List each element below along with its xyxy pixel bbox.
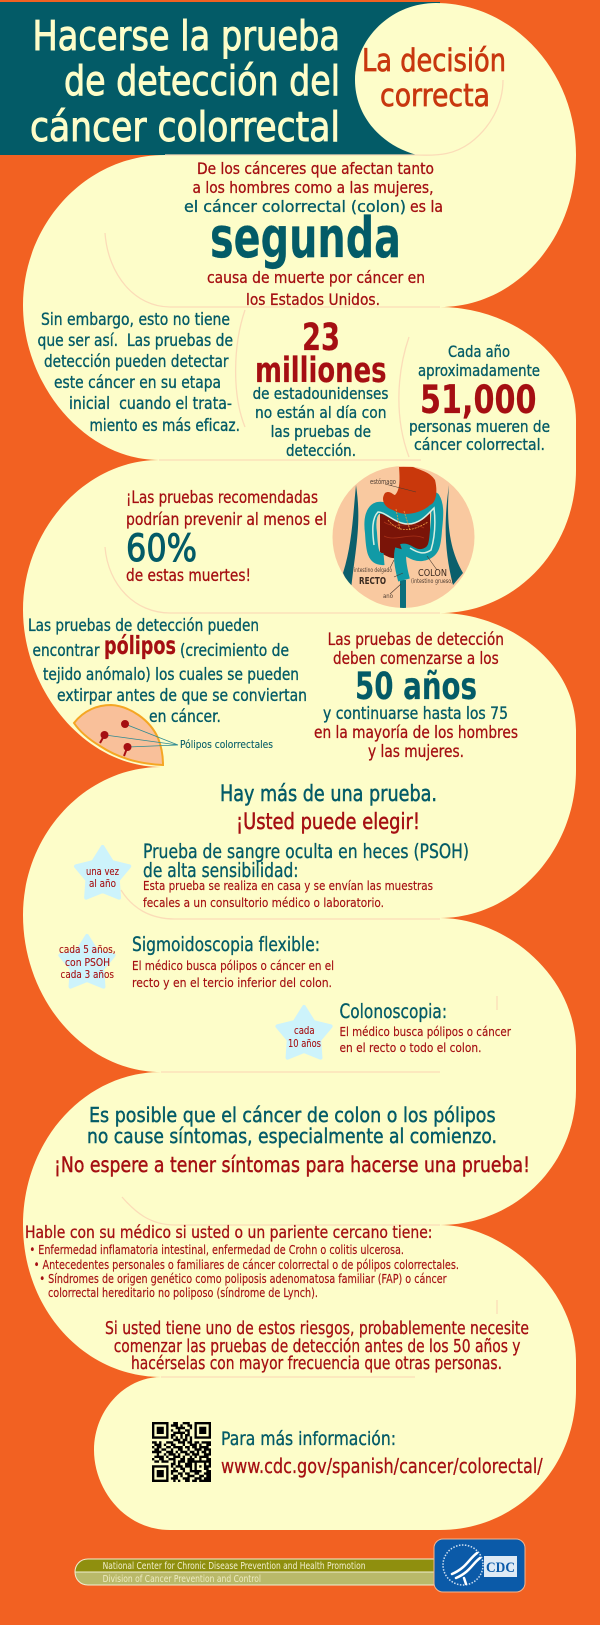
statistic: 60%: de estas muertes! — [126, 566, 251, 586]
logo: HHS and CDC: CDC — [486, 1560, 515, 1576]
text block: screening age: y continuarse hasta los 75 — [323, 704, 508, 723]
intro statement: De los cánceres que afectan tanto — [197, 159, 434, 178]
text block: risk factors: • Síndromes de origen genético como poliposis adenomatosa familiar (FAP) o cáncer — [39, 1271, 447, 1286]
intro statement: causa de muerte por cáncer en — [207, 268, 425, 287]
illustration: digestive system: RECTO — [359, 576, 386, 587]
title banner — [0, 2, 440, 155]
statistic: 51,000: aproximadamente — [418, 361, 540, 380]
text block: polyps: Las pruebas de detección pueden — [28, 616, 259, 636]
subtitle — [362, 43, 506, 114]
statistic: 23 milliones: 23 — [302, 316, 340, 359]
illustration: digestive system: (intestino grueso) — [411, 578, 453, 585]
text block: risk factors: • Antecedentes personales o familiares de cáncer colorrectal o de pólipos colorrectales. — [34, 1257, 459, 1272]
option: stool test — [76, 840, 469, 910]
statistic: 23 milliones: detección. — [286, 441, 356, 460]
statistic: 23 milliones: milliones — [255, 351, 386, 391]
statistic: 23 milliones — [253, 316, 388, 460]
statistic: 51,000 — [409, 342, 550, 454]
option: stool test: al año — [89, 877, 116, 890]
heading: test options: ¡Usted puede elegir! — [236, 810, 420, 835]
option: colonoscopy: en el recto o todo el colon. — [340, 1040, 482, 1055]
text block: symptoms — [54, 1103, 530, 1177]
intro statement — [184, 159, 443, 309]
footer bar: Division of Cancer Prevention and Control — [103, 1574, 261, 1585]
text block: polyps — [28, 616, 307, 727]
logo: HHS and CDC — [434, 1539, 525, 1592]
option: stool test: una vez — [86, 865, 119, 878]
intro statement: los Estados Unidos. — [246, 290, 380, 309]
footer bar — [75, 1559, 438, 1585]
statistic: 60%: ¡Las pruebas recomendadas — [126, 488, 318, 508]
illustration: polyps: Pólipos colorrectales — [180, 739, 273, 751]
option: stool test: Esta prueba se realiza en casa y se envían las muestras — [143, 878, 433, 893]
intro statement: segunda — [210, 206, 401, 271]
text block: early detection: inicial cuando el trata- — [69, 394, 232, 414]
option: colonoscopy — [277, 1000, 512, 1058]
statistic: 51,000: personas mueren de — [409, 417, 550, 436]
statistic: 60%: podrían prevenir al menos el — [126, 510, 327, 530]
text block: early detection: detección pueden detectar — [44, 352, 229, 372]
text block: symptoms: Es posible que el cáncer de colon o los pólipos — [89, 1103, 496, 1127]
text block: screening age — [314, 630, 518, 761]
text block: polyps: tejido anómalo) los cuales se pueden — [43, 665, 299, 685]
more information: Para más información: — [221, 1428, 396, 1450]
option: flexible sigmoidoscopy: cada 5 años, — [59, 943, 116, 956]
text block: higher risk advice: hacérselas con mayor frecuencia que otras personas. — [131, 1354, 502, 1374]
text block: higher risk advice — [105, 1319, 529, 1374]
option: colonoscopy: cada — [294, 1024, 315, 1037]
illustration: digestive system: ano — [383, 592, 393, 600]
heading: test options — [220, 782, 437, 835]
option: stool test: de alta sensibilidad: — [143, 859, 298, 882]
option: flexible sigmoidoscopy — [59, 933, 334, 990]
intro statement: es la — [410, 197, 443, 216]
text block: polyps: pólipos — [104, 631, 176, 660]
option: stool test: Prueba de sangre oculta en heces (PSOH) — [143, 840, 469, 863]
text block: screening age: Las pruebas de detección — [328, 630, 504, 649]
statistic: 60%: 60% — [126, 527, 197, 570]
statistic: 23 milliones: las pruebas de — [271, 422, 371, 441]
text block: polyps: en cáncer. — [149, 707, 221, 727]
option: flexible sigmoidoscopy: con PSOH — [65, 956, 110, 969]
statistic: 51,000: 51,000 — [420, 378, 536, 423]
illustration: digestive system — [332, 466, 474, 610]
text block: risk factors — [25, 1223, 459, 1300]
option: stool test: fecales a un consultorio médico o laboratorio. — [143, 895, 384, 910]
illustration: polyps — [74, 705, 273, 765]
text block: early detection: Sin embargo, esto no tiene — [41, 310, 230, 330]
statistic: 23 milliones: no están al día con — [255, 403, 386, 422]
subtitle: La decisión — [362, 43, 506, 79]
statistic: 60% — [126, 488, 327, 586]
option: flexible sigmoidoscopy: Sigmoidoscopia flexible: — [132, 933, 320, 956]
title: de detección del — [64, 57, 340, 105]
text block: polyps: (crecimiento de — [180, 641, 289, 661]
text block: screening age: deben comenzarse a los — [333, 649, 499, 668]
text block: risk factors: colorrectal hereditario no poliposo (síndrome de Lynch). — [48, 1285, 318, 1300]
statistic: 23 milliones: de estadounidenses — [253, 384, 388, 403]
subtitle: correcta — [380, 78, 490, 114]
QR code — [152, 1423, 211, 1481]
illustration: digestive system: COLON — [418, 568, 447, 579]
option: flexible sigmoidoscopy: El médico busca pólipos o cáncer en el — [132, 958, 334, 973]
title: Hacerse la prueba — [32, 12, 340, 60]
text block: screening age: y las mujeres. — [368, 742, 464, 761]
heading: test options: Hay más de una prueba. — [220, 782, 437, 807]
option: flexible sigmoidoscopy: cada 3 años — [60, 968, 114, 981]
text block: polyps: encontrar — [32, 641, 100, 661]
option: colonoscopy: Colonoscopia: — [340, 1000, 447, 1023]
text block: risk factors: Hable con su médico si usted o un pariente cercano tiene: — [25, 1223, 432, 1243]
text block: screening age: 50 años — [355, 665, 477, 708]
illustration: digestive system: intestino delgado — [354, 566, 392, 574]
text block: early detection: que ser así. Las pruebas de — [38, 331, 233, 351]
text block: early detection: este cáncer en su etapa — [54, 373, 221, 393]
intro statement: a los hombres como a las mujeres, — [192, 178, 434, 197]
text block: symptoms: no cause síntomas, especialmente al comienzo. — [87, 1124, 497, 1148]
text block: risk factors: • Enfermedad inflamatoria intestinal, enfermedad de Crohn o colitis ulcerosa. — [30, 1242, 404, 1257]
option: colonoscopy: 10 años — [288, 1037, 321, 1050]
title: cáncer colorrectal — [30, 103, 340, 151]
option: colonoscopy: El médico busca pólipos o cáncer — [340, 1024, 512, 1039]
footer bar: National Center for Chronic Disease Prevention and Health Promotion — [103, 1561, 365, 1572]
title — [30, 12, 340, 151]
statistic: 51,000: Cada año — [448, 342, 510, 361]
intro statement: el cáncer colorrectal (colon) — [184, 197, 406, 216]
illustration: digestive system: estómago — [370, 478, 396, 486]
text block: polyps: extirpar antes de que se conviertan — [57, 686, 307, 706]
text block: screening age: en la mayoría de los hombres — [314, 723, 518, 742]
text block: early detection: miento es más eficaz. — [90, 416, 240, 436]
text block: early detection — [38, 310, 240, 436]
more information — [221, 1428, 543, 1478]
option: flexible sigmoidoscopy: recto y en el tercio inferior del colon. — [132, 975, 332, 990]
statistic: 51,000: cáncer colorrectal. — [414, 435, 545, 454]
